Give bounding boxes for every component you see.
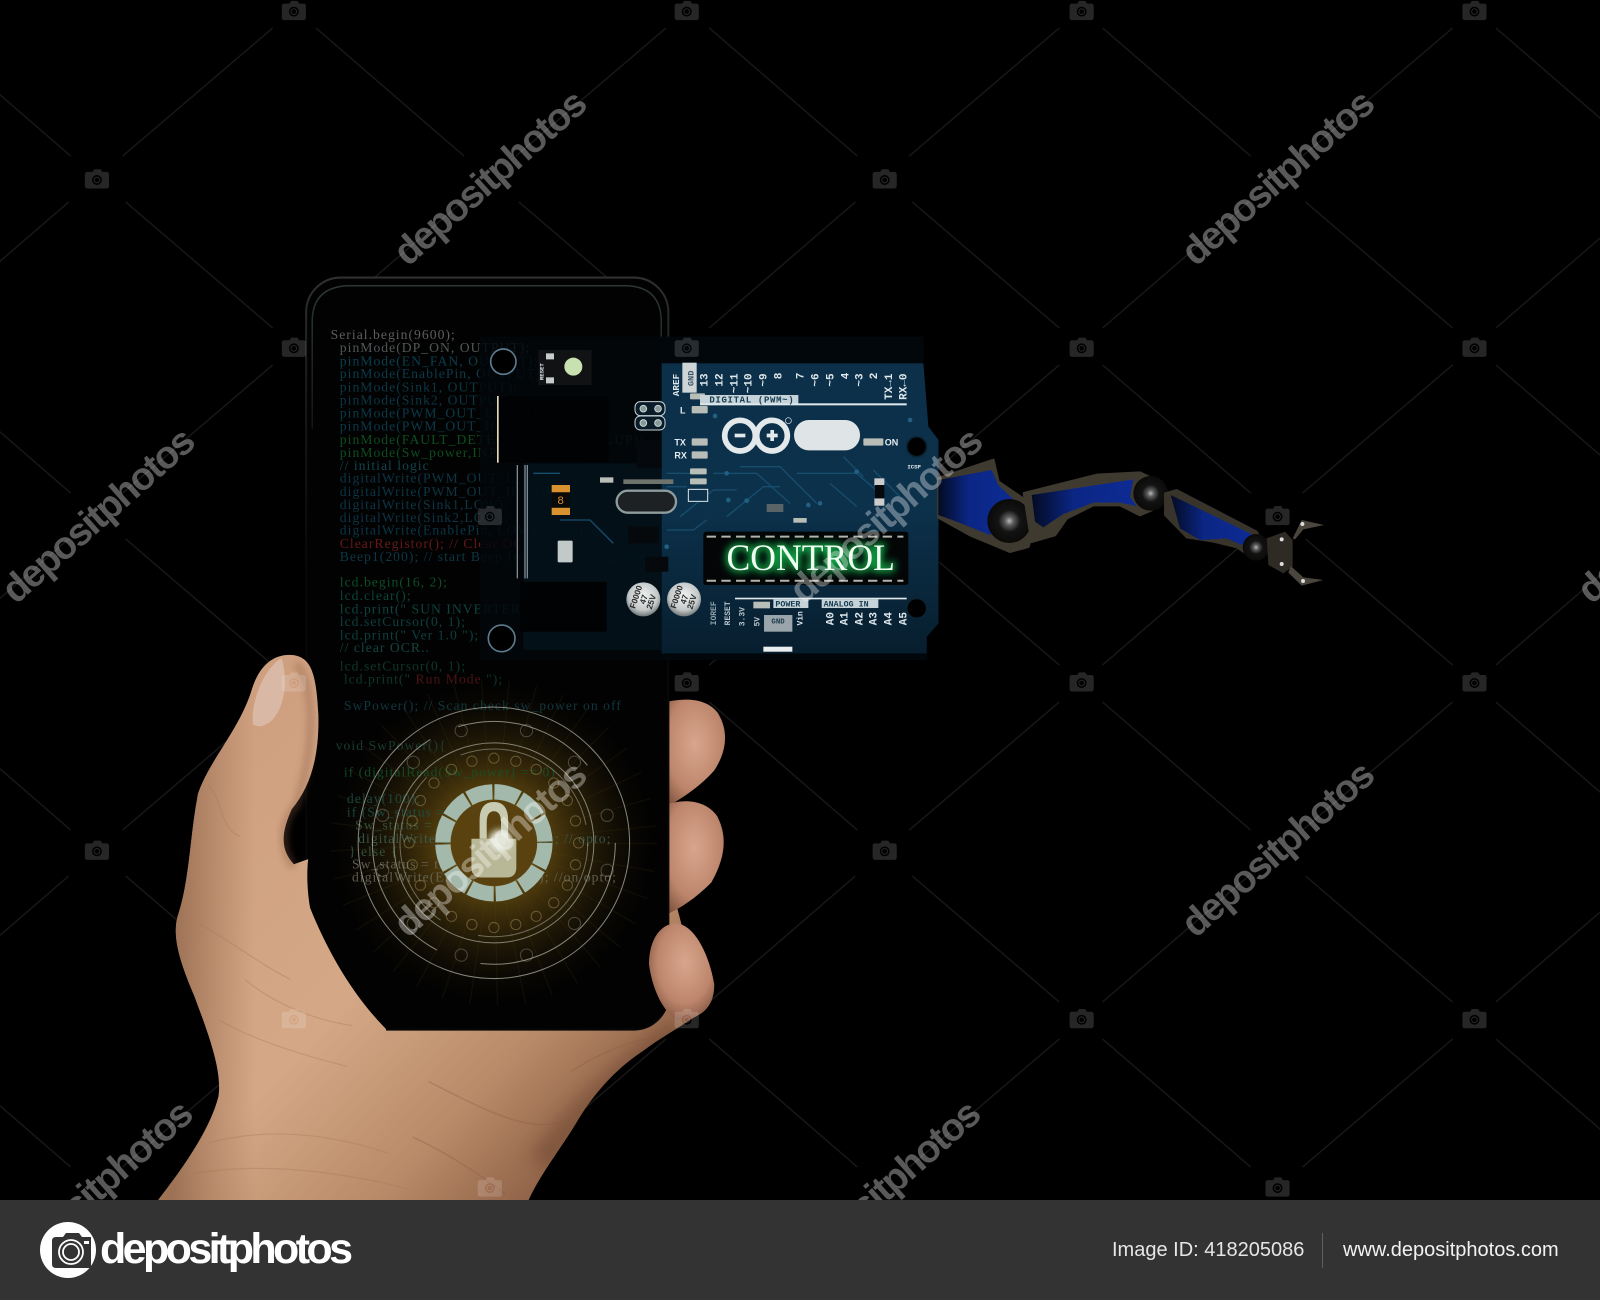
power and analog pin labels xyxy=(710,601,910,626)
footer logo icon xyxy=(40,1222,96,1278)
code listing on phone screen: digitalWrite(Sink1,LOW); xyxy=(340,497,509,513)
capacitors: F0000 xyxy=(627,584,644,610)
arm joint two xyxy=(1133,476,1168,511)
mounting holes xyxy=(488,349,927,652)
digital pin labels: 4 xyxy=(840,372,852,379)
control text glow: CONTROL xyxy=(727,538,895,579)
board shade xyxy=(523,463,662,650)
capacitors: F0000 xyxy=(668,584,685,610)
code listing on phone screen: pinMode(Sink1, OUTPUT); xyxy=(340,379,518,395)
code listing on phone screen: pinMode(Sink2, OUTPUT); xyxy=(340,393,518,409)
small smd parts xyxy=(600,393,884,608)
watermark: depositphotos repeated text: depositphotos xyxy=(781,420,990,612)
power and analog pin labels: A3 xyxy=(869,612,881,625)
code listing on phone screen: delay(100); xyxy=(347,791,421,807)
code listing on phone screen: void SwPower(){ xyxy=(336,738,447,754)
digital pin labels: ~9 xyxy=(759,373,771,387)
HUD inner small circles xyxy=(404,753,584,933)
arduino logo xyxy=(725,418,860,451)
fuse: 8 xyxy=(558,495,564,507)
power and analog labels: GND xyxy=(771,618,785,626)
digital pin labels: ~6 xyxy=(811,373,823,387)
crystal xyxy=(617,491,676,513)
power and analog labels xyxy=(735,598,907,652)
power jack edges xyxy=(517,465,527,578)
arm joint one xyxy=(987,499,1031,543)
code listing on phone screen: Beep1(200); // start Beep from one in programe xyxy=(340,549,647,565)
led labels: RX xyxy=(674,451,687,461)
power and analog pin labels: A4 xyxy=(884,612,896,625)
watermark: depositphotos repeated text: depositphotos xyxy=(385,754,594,946)
thumbnail xyxy=(253,658,285,726)
code listing on phone screen: pinMode(DP_ON, OUTPUT); xyxy=(340,340,530,356)
code listing on phone screen: lcd.print(" SUN INVERTER "); xyxy=(340,601,543,617)
led labels: ICSP xyxy=(907,463,922,470)
reset button: RESET xyxy=(538,363,545,380)
code listing on phone screen: lcd.clear(); xyxy=(340,588,412,604)
code listing on phone screen: pinMode(PWM_OUT_L, OUTPUT); xyxy=(340,405,573,421)
hand in front of the phone: ring finger xyxy=(649,923,714,1021)
code listing on phone screen: // initial logic xyxy=(340,458,430,473)
code listing on phone screen: } else { xyxy=(349,844,398,859)
glow rays xyxy=(387,736,601,950)
capacitors: 47 xyxy=(637,593,650,605)
power and analog pin labels: 5V xyxy=(753,617,762,626)
arm segment three xyxy=(1165,490,1262,555)
code listing on phone screen: pinMode(FAULT_DETECT, INPUT_PULLUP); xyxy=(340,432,644,448)
left edge shading xyxy=(158,689,267,1200)
code listing on phone screen: digitalWrite(Sink2,LOW); xyxy=(340,510,509,526)
power and analog pin labels: 3.3V xyxy=(738,607,747,626)
small chips xyxy=(628,485,884,572)
HUD inner disc xyxy=(451,800,537,886)
power and analog pin labels: RESET xyxy=(724,601,733,625)
power and analog labels: POWER xyxy=(775,599,800,609)
reset button xyxy=(538,350,592,385)
fuse xyxy=(552,485,570,515)
capacitors: 25V xyxy=(685,593,699,610)
code listing on phone screen: ClearRegistor(); // Clear OCR xyxy=(340,536,534,552)
control text: CONTROL xyxy=(727,538,895,579)
arduino board xyxy=(480,337,939,660)
code listing on phone screen: digitalWrite(EnablePin,HIGH); // opto; xyxy=(358,831,611,847)
code listing on phone screen: pinMode(EN_FAN, OUTPUT); xyxy=(340,353,539,369)
arm segment two xyxy=(1024,473,1155,542)
robot arm xyxy=(938,460,1324,586)
code listing on phone screen xyxy=(331,327,647,886)
code listing on phone screen: digitalWrite(PWM_OUT_H, LOW); xyxy=(340,484,570,500)
led labels xyxy=(674,405,922,470)
usb port xyxy=(498,396,608,463)
code listing on phone screen: pinMode(EnablePin, OUTPUT); xyxy=(340,366,546,382)
code listing on phone screen: lcd.setCursor(0, 1); xyxy=(340,614,466,630)
lock glow xyxy=(326,674,662,1011)
security lock HUD xyxy=(358,707,630,979)
hand behind the phone xyxy=(386,700,726,1200)
capacitors xyxy=(626,582,701,616)
arm segment one xyxy=(938,460,1037,552)
power and analog pin labels: A2 xyxy=(854,612,866,625)
board traces xyxy=(533,457,900,543)
code listing on phone screen: lcd.setCursor(0, 1); xyxy=(340,658,466,674)
digital pin labels: GND xyxy=(686,371,696,386)
code listing on phone screen: // clear OCR.. xyxy=(340,640,430,655)
power jack xyxy=(520,582,607,632)
digital pin labels: AREF xyxy=(671,373,682,396)
gripper xyxy=(1267,520,1324,586)
code listing on phone screen: lcd.print(" Run Mode "); xyxy=(344,672,503,688)
code listing on phone screen: lcd.print(" Ver 1.0 "); xyxy=(340,627,479,643)
digital pin labels: ~5 xyxy=(825,373,837,387)
phone xyxy=(306,278,668,1030)
digital pin labels: ~11 xyxy=(729,373,741,393)
power and analog labels: ANALOG IN xyxy=(824,599,869,609)
padlock icon xyxy=(471,802,516,878)
led labels: ON xyxy=(885,437,898,447)
code listing on phone screen: if (digitalRead(Sw_power) == 0) xyxy=(344,765,556,781)
code listing on phone screen: Serial.begin(9600); xyxy=(331,327,456,343)
HUD segmented ring xyxy=(443,792,545,894)
arm joint three xyxy=(1243,534,1269,561)
jumper pads xyxy=(635,402,665,430)
power and analog pin labels: Vin xyxy=(797,611,806,626)
capacitors: 47 xyxy=(678,593,690,605)
power and analog pin labels: A1 xyxy=(840,612,852,625)
code listing on phone screen: SwPower(); // Scan check sw_power on off xyxy=(344,698,622,714)
board vias xyxy=(664,414,912,549)
thumb shading xyxy=(284,663,310,867)
watermark: depositphotos repeated text: depositphotos xyxy=(779,1092,988,1284)
digital pin labels: 2 xyxy=(869,373,881,379)
digital pin labels: TX→1 xyxy=(884,373,896,400)
digital pin labels: 7 xyxy=(796,373,808,379)
power and analog pin labels: A0 xyxy=(825,612,837,625)
code listing on phone screen: digitalWrite(PWM_OUT_L, LOW); xyxy=(340,471,568,487)
code listing on phone screen: pinMode(PWM_OUT_H, OUTPUT); xyxy=(340,419,574,435)
phone screen edge highlight xyxy=(312,286,661,429)
digital pin labels: RX←0 xyxy=(899,373,911,400)
power and analog pin labels: IOREF xyxy=(710,601,719,625)
digital pin labels: ~10 xyxy=(744,373,756,393)
hand in front of the phone: thumb and palm xyxy=(158,655,429,1200)
capacitors: 25V xyxy=(644,593,658,610)
board blue surface xyxy=(662,363,938,653)
code listing on phone screen: pinMode(Sw_power,INPUT_PULLUP); xyxy=(340,445,594,461)
watermark: depositphotos repeated text: depositphotos xyxy=(385,82,594,274)
digital pin labels: 13 xyxy=(700,373,712,387)
control chip xyxy=(703,532,908,585)
watermark: depositphotos repeated text: depositphotos xyxy=(1173,82,1382,274)
digital header label: DIGITAL (PWM~) xyxy=(709,396,794,406)
code listing on phone screen: Sw_status = true; xyxy=(352,856,464,871)
board dark surround xyxy=(660,337,939,660)
footer logo wordmark: depositphotos xyxy=(100,1225,352,1273)
regulator xyxy=(558,541,573,562)
image id: Image ID: 418205086 xyxy=(1112,1239,1304,1261)
code listing on phone screen: Sw_status = false; xyxy=(355,818,473,833)
code listing on phone screen: lcd.begin(16, 2); xyxy=(340,575,448,591)
skin creases xyxy=(194,786,408,1189)
usb port edge xyxy=(497,396,499,463)
usb controller chip xyxy=(637,440,662,468)
digital header label xyxy=(700,395,907,406)
led labels: TX xyxy=(674,437,686,447)
footer bar xyxy=(0,1200,1600,1300)
led labels: L xyxy=(680,405,686,415)
HUD outer small circles xyxy=(377,724,613,961)
power and analog pin labels: A5 xyxy=(898,612,910,625)
code listing on phone screen: digitalWrite(EnablePin, LOW); // stop opto xyxy=(340,523,620,539)
code listing on phone screen: digitalWrite(EnablePin,LOW); //on opto; xyxy=(352,870,617,886)
digital pin labels: ~3 xyxy=(855,373,867,387)
watermark: depositphotos repeated text: depositphotos xyxy=(1173,754,1382,946)
website url: www.depositphotos.com xyxy=(1342,1239,1559,1261)
dim board section under phone xyxy=(480,337,662,660)
digital pin labels: 8 xyxy=(773,372,785,379)
code listing on phone screen: if (Sw_status == true){ xyxy=(347,804,497,820)
digital pin labels: 12 xyxy=(714,373,726,387)
digital pin labels xyxy=(671,363,911,400)
